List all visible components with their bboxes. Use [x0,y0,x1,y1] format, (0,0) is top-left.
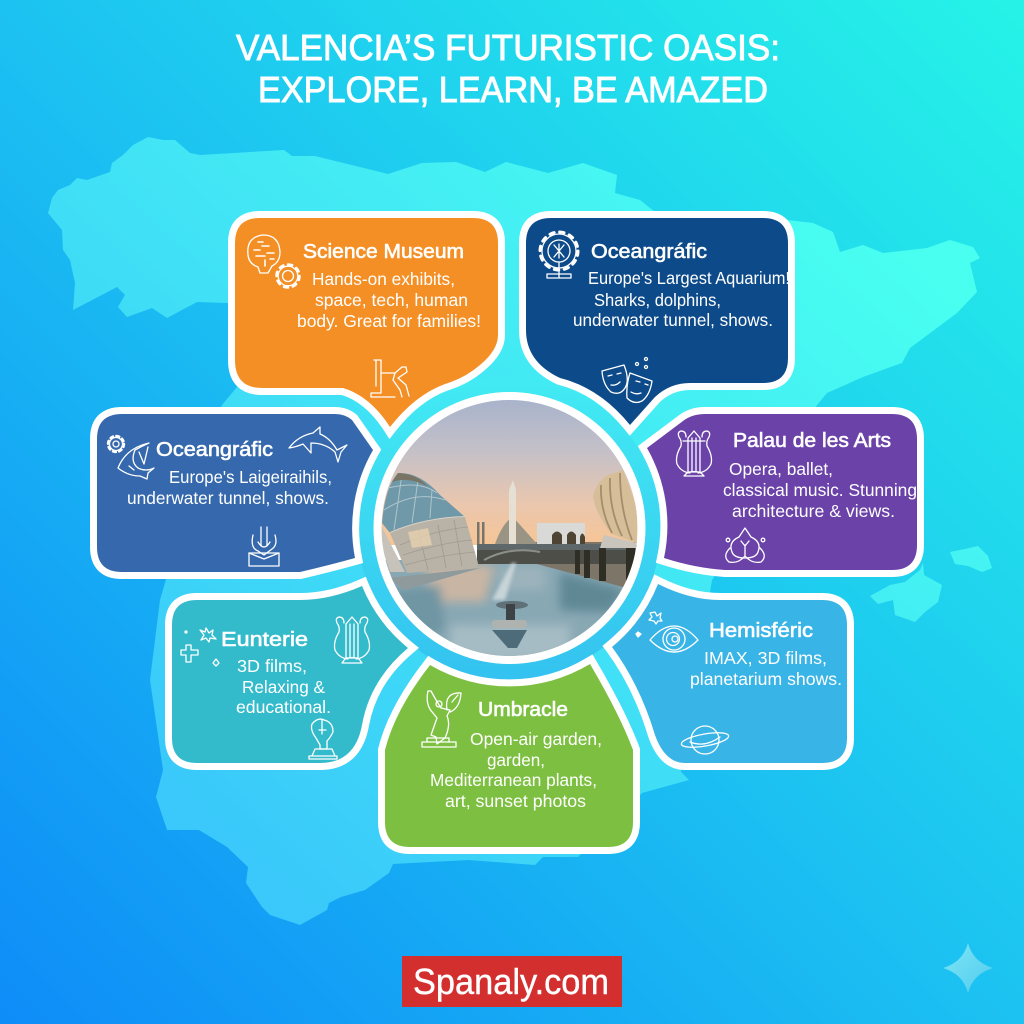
description [723,459,917,521]
description: Europe's Laigeiraihils, [169,467,332,487]
heading: Palau de les Arts [733,430,891,452]
heading: Science Museum [303,241,464,263]
description [297,269,481,331]
panel: Oceanográfic left [97,414,373,572]
description: underwater tunnel, shows. [573,310,773,330]
description: garden, [487,750,545,770]
icon: exhibit figure [371,360,409,397]
icon: four-point sparkle [943,943,993,993]
panel: Eunterie [172,586,408,763]
description: Relaxing & [242,677,325,697]
icon: eye with sparkles [636,612,698,652]
description [690,648,842,689]
icon: tunnel box [249,527,279,566]
icon: dolphin [289,427,347,462]
panel: Science Museum [235,218,498,427]
title: VALENCIA’S FUTURISTIC OASIS: [236,27,780,68]
description: Hands-on exhibits, [312,269,455,289]
icon: brain and gear [248,235,300,288]
icon: lotus figure [726,528,765,562]
description: classical music. Stunning [723,480,917,500]
description: body. Great for families! [297,311,481,331]
description [236,656,331,717]
central ring [357,376,661,680]
description: Opera, ballet, [729,459,833,479]
description: 3D films, [237,656,307,676]
title [236,27,780,110]
description: educational. [236,697,331,717]
icon: sparkles [181,628,219,666]
description [430,729,602,811]
map of Spain silhouette [48,137,992,925]
heading: Oceangráfic [591,241,707,263]
central photo of the City of Arts and Sciences [374,392,646,664]
description [573,268,790,330]
heading: Eunterie [221,629,308,651]
icon: gear and shark [108,436,154,479]
description: underwater tunnel, shows. [127,488,329,508]
title: EXPLORE, LEARN, BE AMAZED [258,69,768,110]
description: architecture & views. [732,501,895,521]
description: art, sunset photos [445,791,586,811]
icon: statue with leaf [422,691,461,747]
heading: Hemisféric [709,620,813,642]
description: IMAX, 3D films, [704,648,827,668]
icon: ringed planet [680,726,730,754]
description: Europe's Largest Aquarium! [588,268,790,288]
panel: Palau de les Arts [647,414,917,570]
description: Sharks, dolphins, [594,290,721,310]
icon: gear globe [540,232,578,278]
heading: Oceangráfic [156,439,273,461]
icon: lyre [676,431,712,476]
description: space, tech, human [315,290,468,310]
description: Mediterranean plants, [430,770,597,790]
icon: lyre [334,617,370,663]
description: Open-air garden, [470,729,602,749]
heading: Umbracle [478,699,568,721]
panel: Umbracle [385,664,633,847]
brand badge: Spanaly.com [413,961,609,1002]
description [127,467,332,508]
icon: globe trophy [309,719,337,759]
description: planetarium shows. [690,669,842,689]
panel: Hemisféric [612,584,847,763]
panel: Oceanográfic top [526,218,790,425]
icon: theatre masks [602,358,652,402]
